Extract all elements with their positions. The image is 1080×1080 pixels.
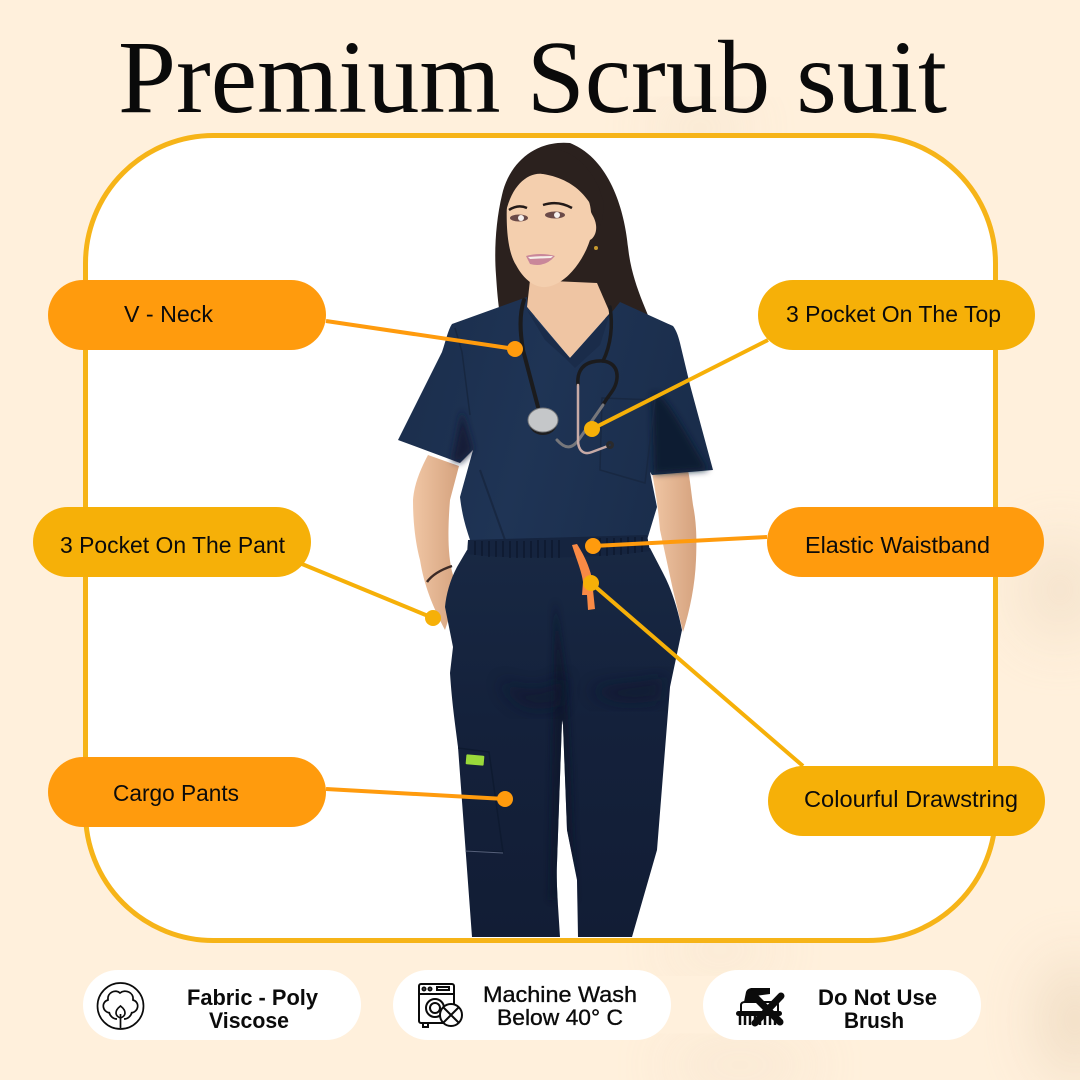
care badge: machine wash: [393, 970, 671, 1040]
care badge: fabric: Fabric - Poly: [187, 985, 319, 1010]
face: [507, 172, 596, 287]
right arm: [652, 470, 696, 632]
callout: 3 Pocket On The Top: [584, 280, 1035, 437]
hair back: [495, 143, 650, 320]
callout: 3 Pocket On The Pant: 3 Pocket On The Pant: [60, 532, 286, 558]
icon: cotton plant: [98, 983, 144, 1029]
care badge: no brush: Do Not Use: [818, 985, 937, 1010]
pants shading: [458, 624, 651, 903]
stethoscope chest piece: [528, 408, 558, 435]
care badge: machine wash: Machine Wash: [483, 982, 637, 1007]
callout: Cargo Pants: Cargo Pants: [113, 780, 239, 806]
figure: woman wearing navy scrub suit: [398, 143, 713, 937]
bracelet: [427, 566, 452, 582]
callout: 3 Pocket On The Top: 3 Pocket On The Top: [786, 301, 1001, 327]
care badge: no brush: [703, 970, 981, 1040]
panel: product photo frame: [86, 136, 996, 940]
pants: [445, 548, 682, 937]
eyes, brows and lips: [509, 203, 598, 265]
icon: washing machine crossed out: [419, 984, 462, 1027]
callout: Elastic Waistband: Elastic Waistband: [805, 532, 990, 558]
callout: V-Neck: V - Neck: [124, 301, 213, 327]
stethoscope: [520, 300, 617, 453]
waistband: [467, 535, 650, 550]
callout: Colourful Drawstring: Colourful Drawstring: [804, 786, 1018, 812]
callout: Elastic Waistband: [585, 507, 1044, 577]
cargo pocket label: [466, 754, 484, 766]
scrub top: [398, 297, 713, 540]
icon: brush crossed out: [736, 988, 782, 1025]
callout: Colourful Drawstring: [583, 575, 1045, 836]
care badge: no brush: Brush: [844, 1008, 904, 1033]
callout: 3 Pocket On The Pant: [33, 507, 441, 626]
callout: Cargo Pants: [48, 757, 513, 827]
hair front: [506, 172, 590, 210]
callout: V-Neck: [48, 280, 523, 357]
waistband gathers: [475, 537, 642, 558]
left arm: [413, 455, 459, 630]
care badge: machine wash: Below 40° C: [497, 1005, 623, 1030]
care badge: fabric: Viscose: [209, 1008, 289, 1033]
care badge: fabric: [83, 970, 361, 1040]
neck and chest: [527, 280, 610, 358]
orange drawstring: [572, 544, 595, 610]
title: Premium Scrub suit: [118, 20, 947, 135]
top shading: [452, 310, 708, 540]
